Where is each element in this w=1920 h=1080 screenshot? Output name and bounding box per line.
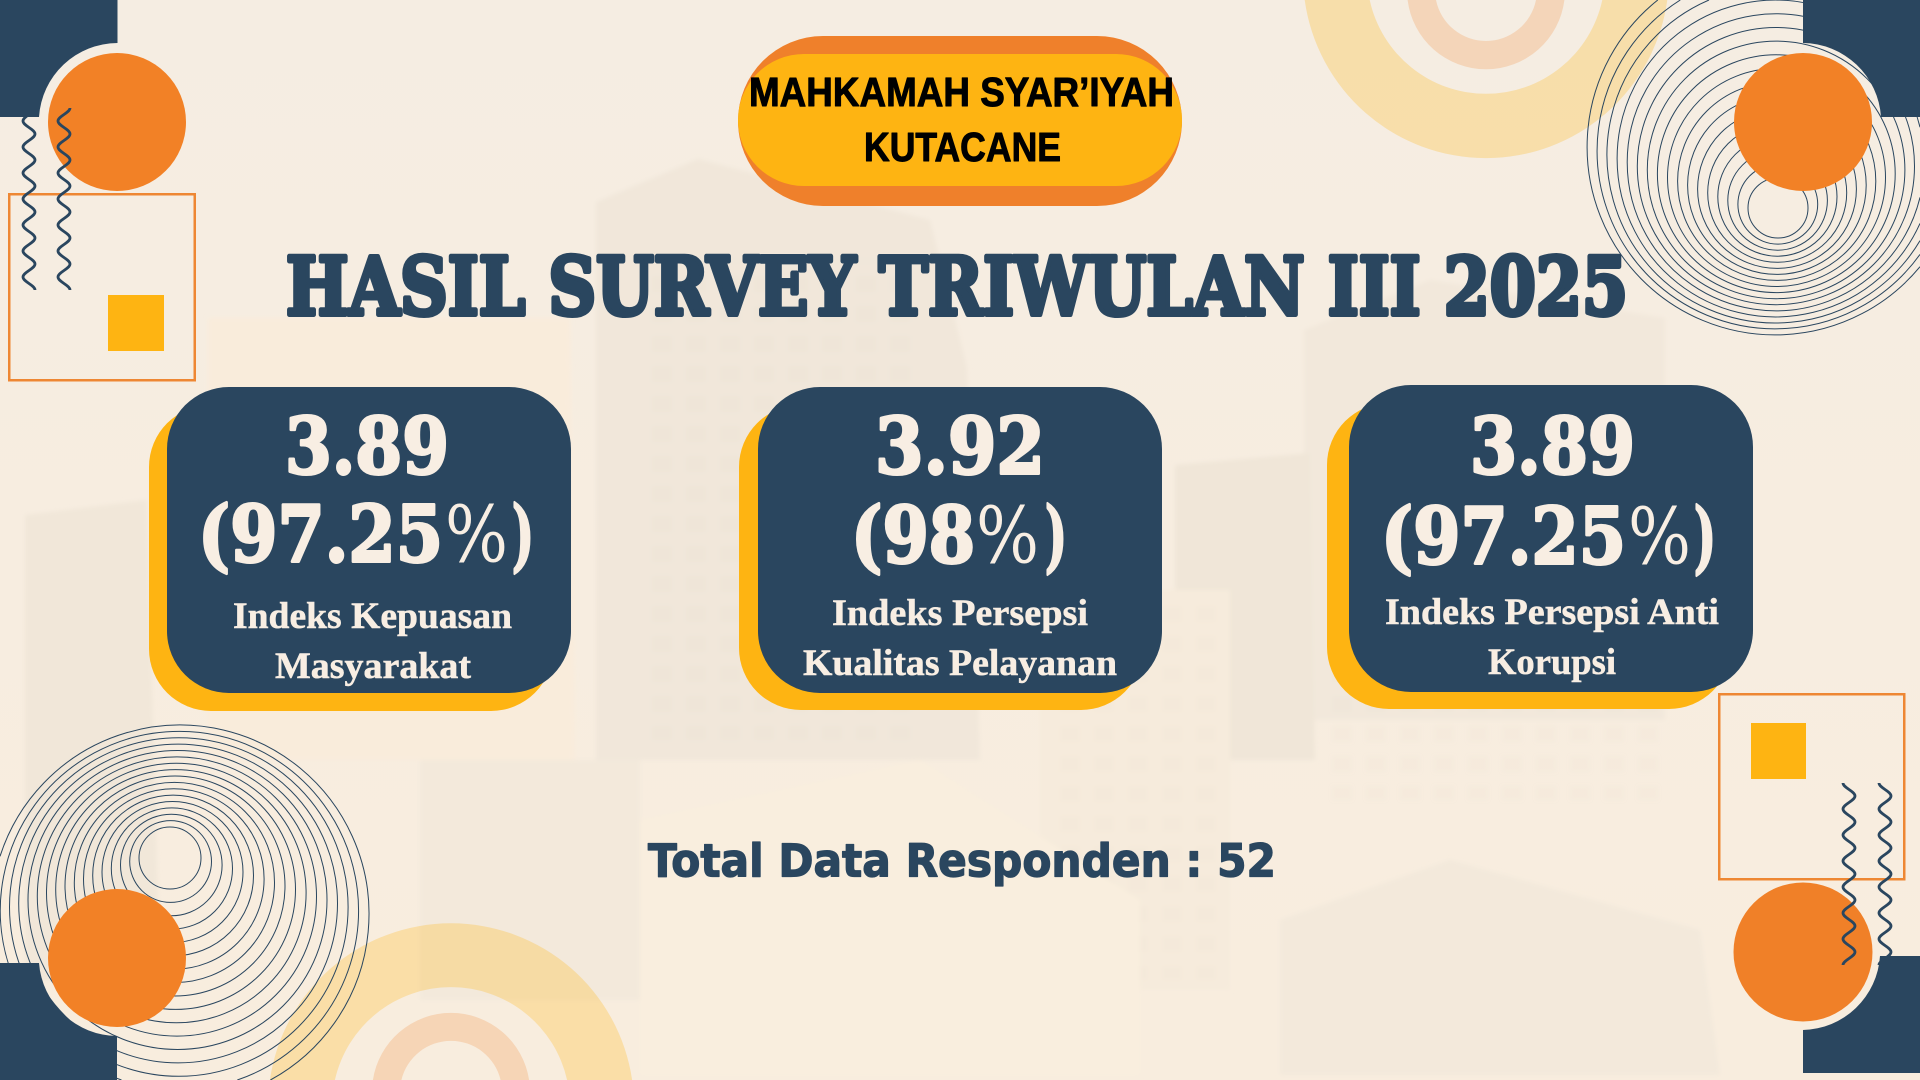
- corner ornament: top left: [0, 0, 195, 380]
- total respondents: Total Data Responden : 52: [648, 834, 1276, 888]
- panel: Indeks Persepsi Kualitas Pelayanan: ): [1045, 490, 1067, 582]
- corner ornament: bottom left: [0, 889, 186, 1080]
- panel: Indeks Persepsi Kualitas Pelayanan: Kualitas Pelayanan: [803, 643, 1117, 684]
- corner ornament: top right: [1734, 0, 1920, 191]
- panel: Indeks Persepsi Kualitas Pelayanan: [739, 387, 1162, 710]
- panel: Indeks Kepuasan Masyarakat: ): [512, 490, 534, 580]
- decorative arcs: top right: [1305, 0, 1667, 158]
- panel: Indeks Persepsi Kualitas Pelayanan: 3.92: [875, 402, 1045, 492]
- decorative arcs: bottom left: [270, 923, 632, 1080]
- panel: Indeks Persepsi Anti Korupsi: Korupsi: [1488, 642, 1616, 683]
- panel: Indeks Persepsi Kualitas Pelayanan: Indeks Persepsi: [832, 593, 1088, 634]
- corner ornament: bottom right: [1719, 694, 1920, 1073]
- panel: Indeks Kepuasan Masyarakat: 3.89: [285, 402, 449, 492]
- panel: Indeks Persepsi Anti Korupsi: 3.89: [1470, 402, 1635, 492]
- title: HASIL SURVEY TRIWULAN III 2025: [286, 240, 1628, 334]
- panel: Indeks Kepuasan Masyarakat: Masyarakat: [275, 646, 472, 687]
- panel: Indeks Persepsi Anti Korupsi: (97.25: [1381, 492, 1626, 582]
- concentric line rings: bottom left: [0, 725, 369, 1080]
- panel: Indeks Kepuasan Masyarakat: (97.25: [198, 490, 443, 580]
- panel: Indeks Persepsi Kualitas Pelayanan: (98: [851, 490, 975, 582]
- panel: Indeks Persepsi Anti Korupsi: Indeks Persepsi Anti: [1385, 592, 1719, 633]
- concentric line rings: top right: [1587, 0, 1920, 335]
- header pill: Mahkamah Syar'iyah Kutacane: KUTACANE: [864, 124, 1061, 170]
- panel: Indeks Persepsi Anti Korupsi: [1327, 385, 1753, 709]
- panel: Indeks Kepuasan Masyarakat: Indeks Kepuasan: [233, 596, 512, 637]
- panel: Indeks Persepsi Anti Korupsi: ): [1694, 492, 1716, 582]
- header pill: Mahkamah Syar'iyah Kutacane: [738, 36, 1182, 206]
- panel: Indeks Kepuasan Masyarakat: [149, 387, 571, 711]
- panel: Indeks Persepsi Anti Korupsi: %: [1628, 492, 1691, 582]
- header pill: Mahkamah Syar'iyah Kutacane: MAHKAMAH SYAR’IYAH: [749, 69, 1174, 115]
- panel: Indeks Persepsi Kualitas Pelayanan: %: [976, 492, 1039, 582]
- panel: Indeks Kepuasan Masyarakat: %: [445, 490, 508, 580]
